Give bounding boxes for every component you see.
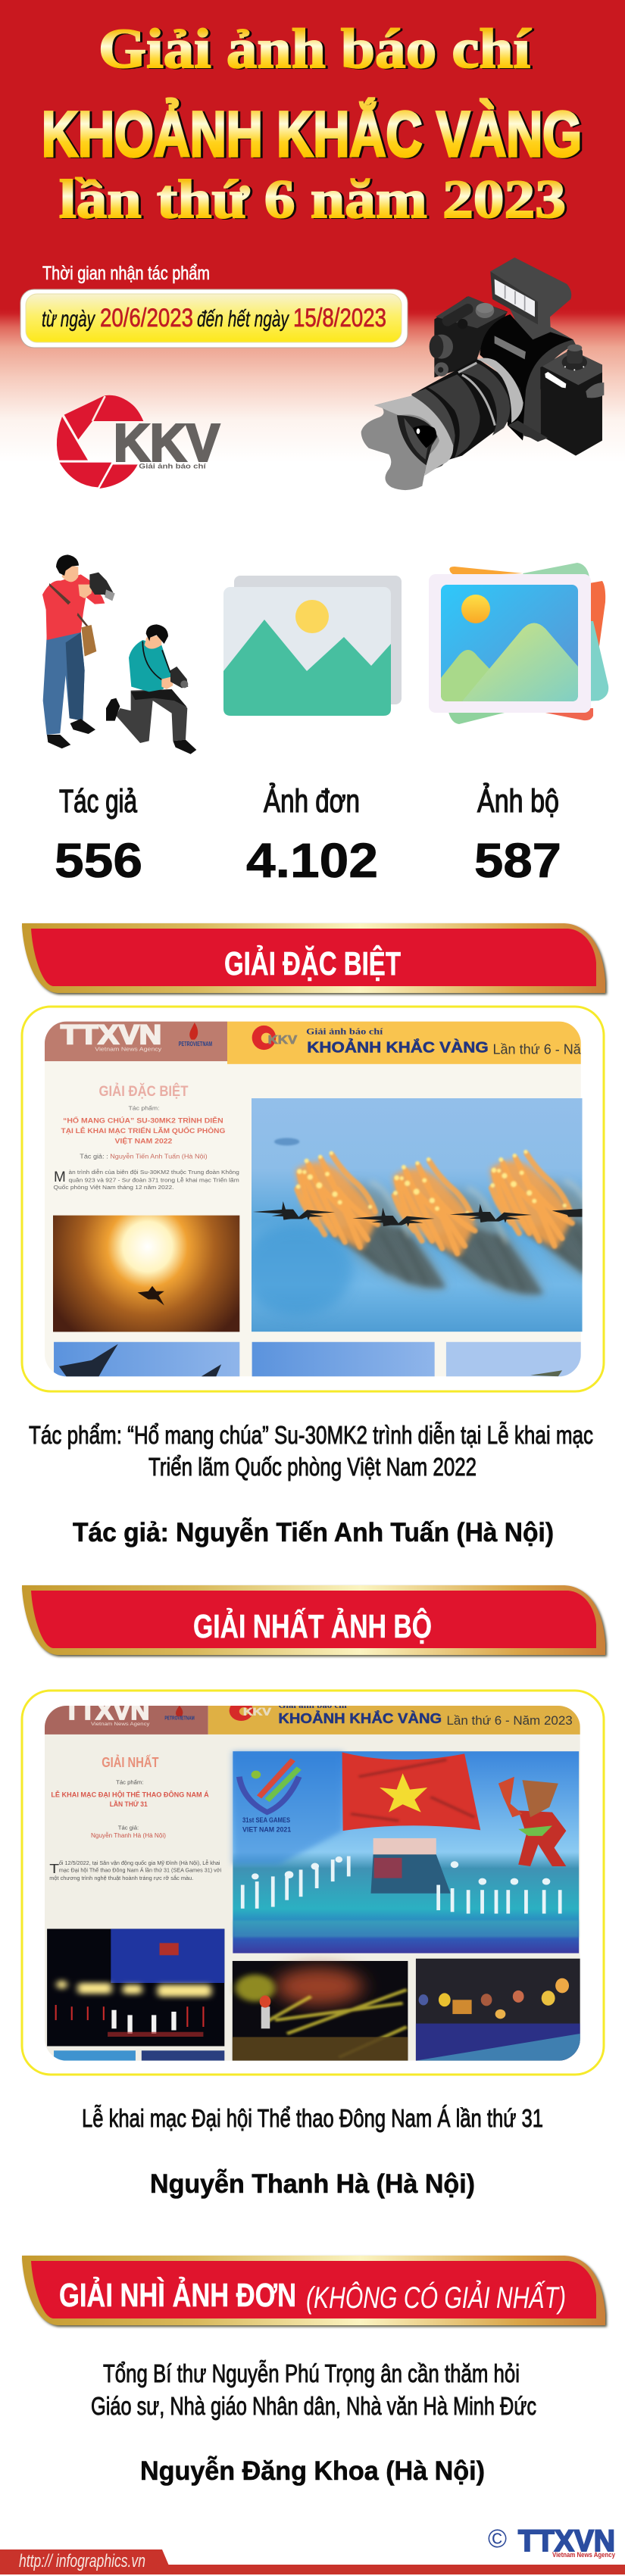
exhibition board: KHOẢNH KHẮC VÀNG [307, 1038, 489, 1056]
icon: KKV logo: Giải ảnh báo chí [139, 463, 206, 470]
caption: second prize work: Tổng Bí thư Nguyễn Phú Trọng ân cần thăm hỏi [103, 2359, 520, 2387]
stat: single photos [246, 782, 378, 888]
stat: photo sets [474, 782, 561, 888]
author: first prize: Nguyễn Thanh Hà (Hà Nội) [150, 2169, 475, 2199]
caption: special prize work [29, 1421, 593, 1481]
date pill: đến hết ngày [197, 307, 289, 332]
date pill: 15/8/2023 [293, 304, 386, 333]
panel: first prize photo set: Nguyễn Thanh Hà (Hà Nội) [91, 1832, 166, 1839]
footer bar [0, 2549, 625, 2574]
lens [413, 358, 523, 464]
panel: first prize photo set: Tác giả: [118, 1824, 139, 1831]
copyright and TTXVN logo: Vietnam News Agency [552, 2551, 615, 2559]
stat: single photos: Ảnh đơn [264, 782, 360, 820]
exhibition board [45, 1020, 582, 1379]
date pill [20, 289, 408, 348]
kneeling photographer [106, 624, 196, 754]
exhibition board: Tác giả: : Nguyễn Tiến Anh Tuấn (Hà Nội) [80, 1154, 208, 1160]
header gradient fade [0, 309, 625, 464]
footer bar: http:// infographics.vn [19, 2551, 145, 2571]
exhibition board: KKV [268, 1034, 298, 1047]
body centre [480, 314, 573, 441]
banner: first prize photo set: GIẢI NHẤT ẢNH BỘ [193, 1606, 432, 1645]
submission period label: Thời gian nhận tác phẩm [42, 263, 210, 284]
author: second prize: Nguyễn Đăng Khoa (Hà Nội) [140, 2456, 485, 2486]
panel: special prize photo [22, 1007, 625, 1391]
exhibition board: VIỆT NAM 2022 [115, 1136, 172, 1145]
panel: first prize photo set: LỄ KHAI MẠC ĐẠI HỘI THỂ THAO ĐÔNG NAM Á [51, 1790, 209, 1799]
exhibition board: “HỔ MANG CHÚA” SU-30MK2 TRÌNH DIỄN [63, 1116, 223, 1126]
author: special prize: Tác giả: Nguyễn Tiến Anh Tuấn (Hà Nội) [73, 1517, 554, 1547]
stat: authors: 556 [55, 833, 142, 888]
panel: first prize photo set: T [49, 1861, 59, 1876]
panel: first prize photo set: Tác phẩm: [116, 1778, 143, 1785]
standing photographer [42, 554, 115, 748]
exhibition board: àn trình diễn của biên đội Su-30KM2 thuộc Trung đoàn Không [69, 1169, 239, 1176]
date pill: 20/6/2023 [100, 304, 193, 333]
title line 3: lần thứ 6 năm 2023 [59, 169, 566, 229]
panel: first prize photo set: một chương trình nghệ thuật hoành tráng rực rỡ sắc màu. [49, 1875, 193, 1881]
exhibition board: Giải ảnh báo chí [306, 1027, 383, 1037]
banner: special prize [22, 923, 607, 994]
panel: first prize photo set: LẦN THỨ 31 [110, 1800, 148, 1809]
panel: first prize photo set: KHOẢNH KHẮC VÀNG [278, 1710, 442, 1727]
icon: photographers [42, 554, 196, 754]
header background [0, 0, 625, 312]
stat: photo sets: Ảnh bộ [477, 782, 559, 820]
icon: KKV logo [57, 395, 220, 489]
exhibition board: quân 923 và 927 - Sư đoàn 371 trong Lễ khai mạc Triển lãm [69, 1177, 239, 1184]
title [42, 18, 582, 229]
balloons photo [416, 1959, 580, 2061]
exhibition board: TTXVN [61, 1020, 161, 1050]
body right [540, 350, 602, 456]
mascot [518, 1810, 566, 1866]
exhibition board: TẠI LỄ KHAI MẠC TRIỂN LÃM QUỐC PHÒNG [61, 1126, 225, 1135]
main ceremony photo: VIET NAM 2021 [242, 1826, 292, 1834]
date pill: từ ngày [42, 307, 95, 332]
torch photo [233, 1961, 408, 2061]
stat: single photos: 4.102 [246, 833, 378, 888]
main ceremony photo [233, 1751, 579, 1953]
panel: first prize photo set: mạc Đại hội Thể thao Đông Nam Á lần thứ 31 (SEA Games 31) với [59, 1867, 221, 1873]
icon: KKV logo: KKV [114, 413, 220, 472]
panel: first prize photo set: ối 12/5/2022, tại Sân vận động quốc gia Mỹ Đình (Hà Nội), Lễ khai [59, 1859, 220, 1866]
banner: second prize single photo [22, 2256, 607, 2327]
stat: photo sets: 587 [474, 833, 561, 888]
exhibition board: GIẢI ĐẶC BIỆT [99, 1083, 189, 1100]
panel: first prize photo set: GIẢI NHẤT [102, 1755, 159, 1771]
stat: authors [55, 783, 142, 888]
panel: first prize photo set: PETROVIETNAM [164, 1715, 195, 1722]
banner: first prize photo set [22, 1585, 607, 1656]
caption: special prize work: Triển lãm Quốc phòng Việt Nam 2022 [148, 1453, 477, 1481]
title line 1: Giải ảnh báo chí [98, 18, 532, 80]
icon: photo set [429, 563, 608, 724]
parade photo [47, 1929, 224, 2061]
panel: first prize photo set: Lần thứ 6 - Năm 2023 [446, 1713, 573, 1728]
exhibition board: PETROVIETNAM [179, 1041, 212, 1048]
flash unit [490, 258, 573, 360]
thumbnails [54, 1342, 239, 1379]
banner: special prize: GIẢI ĐẶC BIỆT [224, 945, 401, 982]
exhibition board: Tác phẩm: [128, 1104, 160, 1111]
panel: first prize photo set: Vietnam News Agency [91, 1720, 150, 1727]
main photo: jets and flares [252, 1098, 583, 1332]
exhibition board: M [54, 1169, 66, 1185]
lens hood [411, 389, 455, 473]
caption: second prize work [91, 2359, 536, 2420]
exhibition board: Lần thứ 6 - Nă [493, 1041, 582, 1057]
icon: single photo [223, 576, 402, 716]
panel: first prize photo set [22, 1691, 604, 2075]
exhibition board: Vietnam News Agency [95, 1046, 161, 1053]
banner: second prize single photo: GIẢI NHÌ ẢNH ĐƠN [59, 2276, 296, 2314]
stat: authors: Tác giả [59, 783, 137, 820]
panel: first prize photo set: Giải ảnh báo chí [278, 1701, 348, 1710]
icon: camera [361, 258, 604, 490]
sun photo [53, 1216, 239, 1332]
panel: first prize photo set: TTXVN [64, 1697, 149, 1725]
copyright and TTXVN logo: © [488, 2524, 507, 2553]
panel: first prize photo set: KKV [243, 1706, 272, 1718]
copyright and TTXVN logo: TTXVN [518, 2524, 615, 2558]
main ceremony photo: 31st SEA GAMES [242, 1817, 291, 1825]
body left [434, 297, 508, 377]
exhibition board: Quốc phòng Việt Nam tháng 12 năm 2022. [54, 1184, 173, 1191]
